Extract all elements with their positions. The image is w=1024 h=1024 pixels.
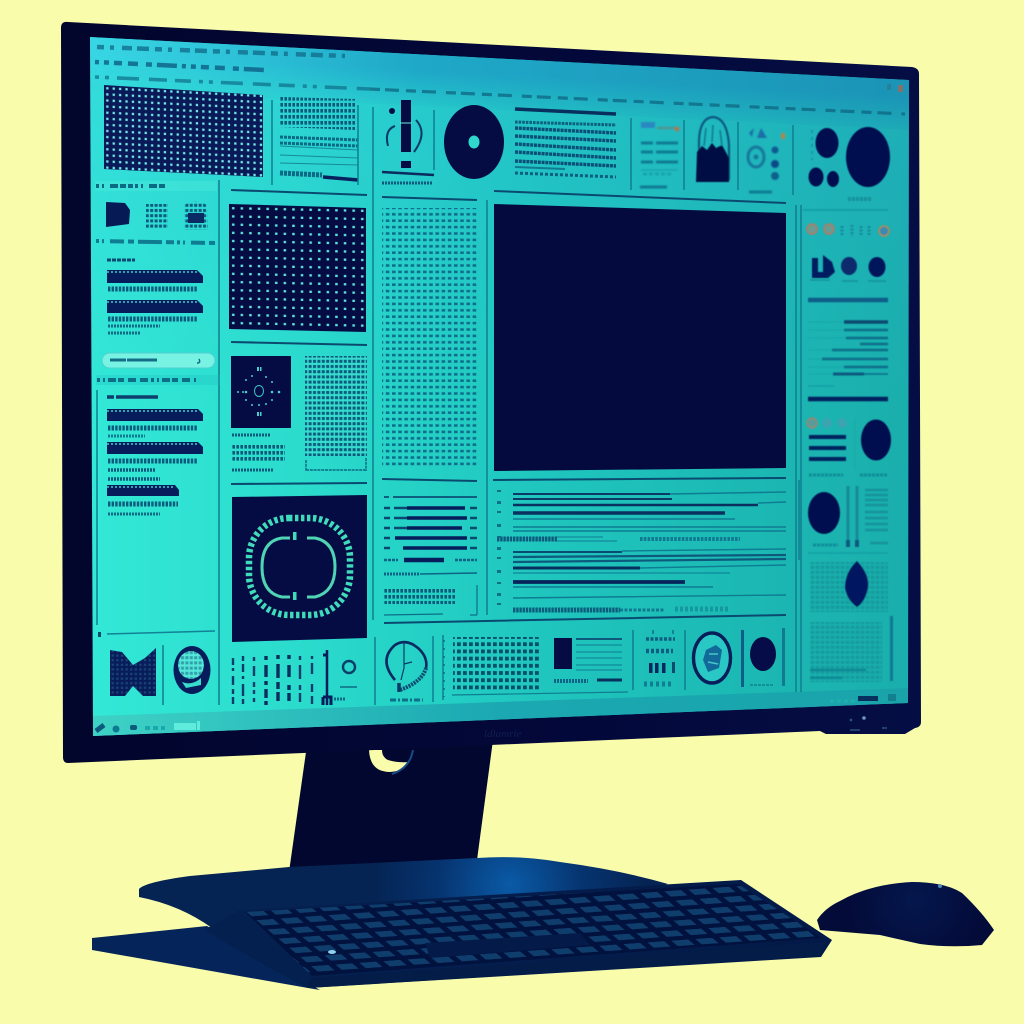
- centre progress rows: [384, 497, 477, 615]
- vertical bars and disc: [741, 628, 785, 687]
- monitor stand neck: [289, 740, 493, 872]
- right column widgets: [803, 210, 893, 682]
- column glyph chart: [233, 650, 331, 705]
- bottom right grid: [810, 616, 893, 682]
- dots panel: [305, 356, 367, 471]
- status bar icons: [96, 694, 896, 732]
- mouse: [817, 882, 994, 946]
- sidebar header two: [96, 241, 215, 243]
- panel: black main view: [494, 204, 786, 471]
- sidebar header three: [96, 375, 220, 385]
- colour dots: [807, 224, 889, 236]
- icon: M shape: [110, 648, 156, 696]
- panel dividers: [97, 100, 801, 705]
- monitor bezel: [61, 22, 921, 763]
- right rule: [803, 209, 888, 211]
- ring icon and caption: [334, 661, 357, 699]
- thick rule: [808, 397, 888, 401]
- small dots with bars: [807, 418, 888, 475]
- screen title strip: [90, 37, 909, 130]
- bezel logo text: ldlamrie: [484, 728, 521, 740]
- gauge clock icon: [386, 642, 426, 700]
- bezel indicator lights: [850, 716, 887, 731]
- pattern with leaf: [810, 561, 888, 612]
- sidebar icons row: [106, 202, 208, 230]
- sidebar bars group one: [107, 260, 203, 333]
- ring badge: [694, 633, 730, 683]
- sidebar bars group two: [107, 397, 203, 514]
- widget top right bars: [640, 122, 680, 187]
- screen background: [90, 37, 909, 736]
- bottom list with square: [444, 638, 628, 697]
- monitor stand base: [92, 857, 668, 990]
- search pill: [102, 353, 215, 368]
- centre dot column: [382, 208, 478, 468]
- text beneath radial panel: [232, 435, 285, 470]
- panel: dot grid top left: [104, 85, 263, 177]
- keyboard: [204, 880, 832, 988]
- slim columns: [808, 486, 888, 553]
- panel: dark dot grid: [229, 204, 366, 332]
- long bar list: [497, 490, 786, 615]
- small bars widget: [644, 630, 675, 684]
- panel: dark ring display: [232, 495, 367, 642]
- text list top centre: [515, 109, 616, 177]
- right aligned bars: [808, 322, 888, 386]
- screen status strip: [93, 688, 908, 736]
- sidebar footer rule: [98, 631, 215, 637]
- menu bars: [95, 47, 905, 114]
- icon: head outline: [174, 646, 210, 694]
- exclamation gauge icon: [382, 100, 434, 183]
- disc: [861, 420, 891, 460]
- widget dial and dots: [748, 128, 785, 192]
- text block beside dot grid: [280, 97, 358, 180]
- blue heading bar: [808, 298, 888, 302]
- bottom dot matrix: [453, 637, 541, 692]
- arch chart icon: [696, 117, 729, 182]
- large disc: [444, 105, 504, 179]
- space bar: [425, 933, 590, 958]
- circle cluster top right: [808, 127, 890, 199]
- keyboard keys: [245, 884, 822, 976]
- sidebar header one: [95, 181, 217, 191]
- panel: dark radial dots: [231, 356, 291, 428]
- disc two: [808, 492, 840, 534]
- dark icons row: [810, 255, 886, 281]
